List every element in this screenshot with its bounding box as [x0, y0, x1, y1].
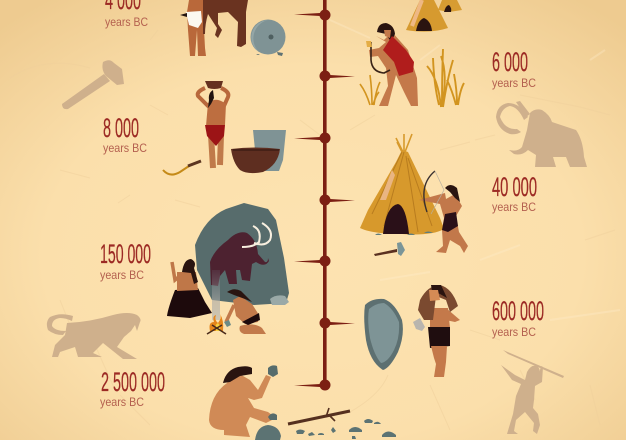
figure: man with loincloth — [180, 0, 206, 56]
figure: seated woman — [167, 259, 212, 318]
date: 2 500 000 years BC: years BC — [100, 395, 144, 409]
icon: clay bowl — [231, 148, 280, 173]
silhouette: spear hunter — [501, 350, 564, 434]
icon: campfire — [207, 314, 226, 334]
figure: woman carrying bowl — [198, 81, 228, 168]
date: 8 000 years BC — [103, 113, 147, 155]
timeline node 2 — [320, 70, 355, 82]
figure: squatting man with stone — [209, 365, 278, 437]
date: 4 000 years BC: years BC — [105, 15, 148, 29]
timeline node 1 — [294, 10, 330, 20]
icon: stone axe — [374, 242, 405, 256]
date: 600 000 years BC — [492, 296, 544, 339]
small hut — [438, 0, 462, 12]
silhouette: stone hammer — [62, 60, 124, 109]
date: 150 000 years BC: 150 000 — [100, 239, 151, 269]
icon: millstone — [250, 20, 286, 56]
icon: wooden branch — [288, 408, 350, 424]
date: 2 500 000 years BC — [100, 367, 165, 409]
big thatched hut — [360, 134, 444, 235]
icon: pebbles — [296, 419, 396, 439]
date: 6 000 years BC: 6 000 — [492, 47, 528, 77]
timeline node 5 — [294, 256, 330, 266]
icon: grey pot — [253, 130, 286, 171]
grass tuft small — [360, 75, 380, 105]
date: 600 000 years BC: years BC — [492, 325, 536, 339]
date: 6 000 years BC — [492, 47, 536, 90]
date: 8 000 years BC: years BC — [103, 141, 147, 155]
timeline node 6 — [320, 318, 355, 328]
figure: archer — [419, 171, 468, 253]
main hut — [406, 0, 448, 32]
date: 600 000 years BC: 600 000 — [492, 296, 544, 326]
icon: flint hand axe — [364, 299, 403, 370]
date: 150 000 years BC: years BC — [100, 268, 144, 282]
huts at top — [406, 0, 462, 32]
date: 40 000 years BC — [492, 172, 537, 214]
timeline — [294, 0, 355, 390]
figure: reaping woman — [366, 23, 418, 106]
icon: grinding stone — [255, 425, 281, 440]
figure: man carrying animal hide — [413, 285, 460, 377]
date: 8 000 years BC: 8 000 — [103, 113, 139, 143]
timeline node 3 — [294, 132, 330, 144]
grass tuft large — [427, 49, 464, 107]
cave mammoth tusks — [242, 223, 271, 247]
silhouette: sabre-tooth cat — [47, 313, 141, 359]
silhouette: mammoth — [496, 101, 587, 167]
timeline node 7 — [294, 380, 330, 390]
cave rock with mammoth painting — [195, 203, 289, 305]
date: 4 000 years BC — [105, 0, 148, 29]
figure: crouching man — [224, 289, 266, 334]
timeline node 4 — [320, 194, 355, 206]
date: 6 000 years BC: years BC — [492, 76, 536, 90]
date: 150 000 years BC — [100, 239, 151, 282]
date: 40 000 years BC: 40 000 — [492, 172, 537, 202]
date: 40 000 years BC: years BC — [492, 200, 536, 214]
smoke from fire — [212, 270, 220, 320]
figure: domesticated animal — [203, 0, 248, 47]
date: 2 500 000 years BC: 2 500 000 — [101, 367, 165, 397]
icon: sickle — [163, 161, 201, 175]
cave mammoth — [210, 232, 269, 286]
